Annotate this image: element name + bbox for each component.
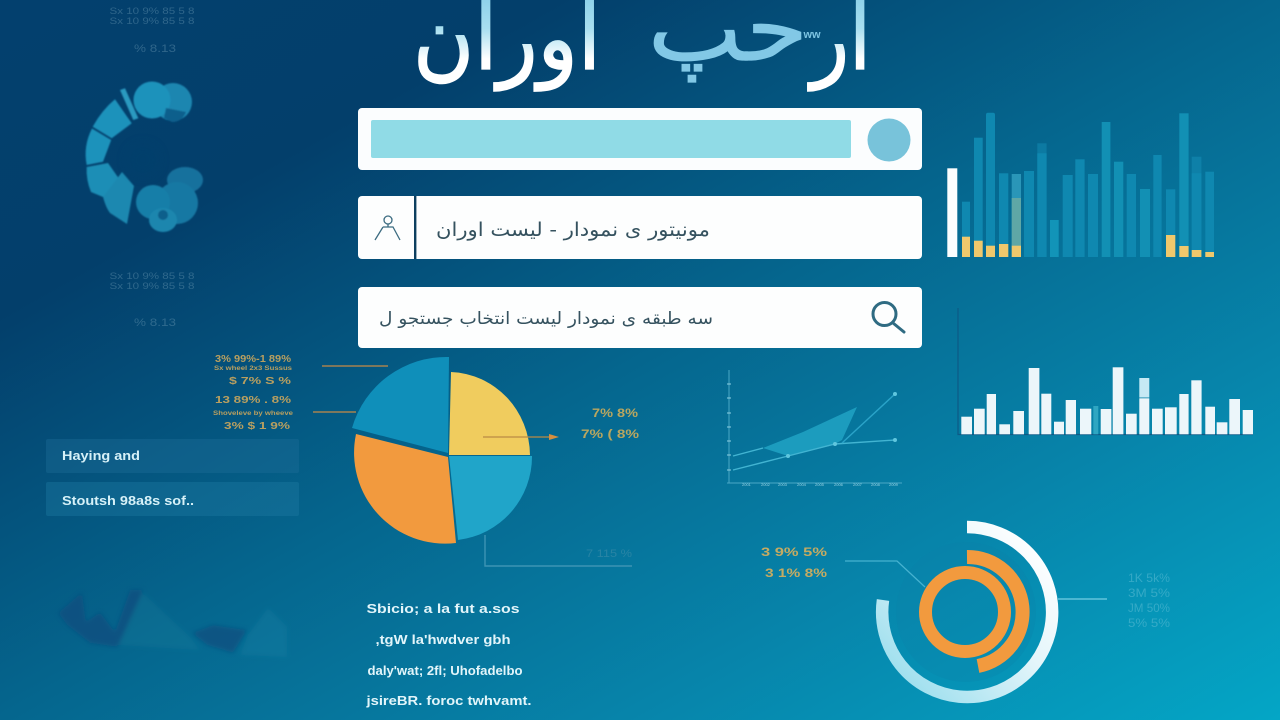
- slice: blue: [352, 357, 449, 453]
- slice: orange: [354, 434, 456, 544]
- pie labels: left: $ 7% S %: [229, 376, 291, 387]
- row 1: [46, 439, 299, 473]
- leader lines: left of pie: [313, 366, 388, 412]
- faded labels: upper left: [110, 6, 194, 329]
- middle orange arc: [967, 557, 1023, 666]
- faded labels: upper left: Sx 10 9% 85 5 8: [110, 6, 194, 16]
- search bar: query field: [358, 287, 922, 348]
- x labels: 2001: [742, 482, 752, 487]
- ring label: left: 3 9% 5%: [761, 545, 827, 559]
- title: [413, 0, 871, 92]
- markers: [786, 392, 897, 458]
- paragraph text: daly'wat; 2fl; Uhofadelbo: [368, 663, 523, 678]
- x labels: 2003: [778, 482, 788, 487]
- donut center shade: [127, 144, 159, 176]
- pie labels: left: [213, 354, 294, 432]
- yellow bars: [962, 235, 1214, 257]
- ring label: left: [761, 545, 827, 580]
- faded labels: upper left: Sx 10 9% 85 5 8: [110, 271, 194, 281]
- search bar: progress: [358, 108, 922, 170]
- white bars: [961, 367, 1253, 434]
- ring label: right faded: 1K 5k%: [1128, 571, 1170, 585]
- bar chart: white: [958, 308, 1253, 434]
- pie arrow: [483, 434, 559, 440]
- x labels: 2009: [889, 482, 899, 487]
- x labels: 2002: [761, 482, 771, 487]
- inner orange ring: [926, 572, 1004, 652]
- axes: [727, 370, 902, 483]
- x labels: 2006: [834, 482, 844, 487]
- ring leader: right: [1058, 598, 1107, 600]
- pie label: right: 7% 8%: [592, 406, 638, 420]
- pie labels: left: Sx wheel 2x3 Sussus: [214, 366, 293, 372]
- ring track: [896, 542, 1036, 682]
- faded labels: upper left: % 8.13: [134, 43, 176, 55]
- slice: yellow: [449, 372, 530, 455]
- faded labels: upper left: Sx 10 9% 85 5 8: [110, 281, 194, 291]
- icon: person: [375, 216, 400, 240]
- x labels: 2004: [797, 482, 807, 487]
- ring label: right faded: 3M 5%: [1128, 586, 1170, 600]
- ring label: left: 3 1% 8%: [765, 566, 827, 580]
- ring chart: [882, 527, 1052, 697]
- pie chart: [352, 357, 532, 544]
- pie labels: left: 3% 99%-1 89%: [215, 354, 291, 365]
- white bar: [947, 168, 957, 257]
- x labels: 2005: [815, 482, 825, 487]
- accent bars: [1139, 378, 1149, 398]
- pie labels: left: 13 89% . 8%: [215, 395, 291, 406]
- search bar: user field: [358, 196, 922, 259]
- faded labels: upper left: % 8.13: [134, 317, 176, 329]
- pie labels: left: Shoveleve by wheeve: [213, 411, 294, 417]
- ring segments: [86, 88, 138, 224]
- icon: magnifier: [873, 302, 904, 332]
- pie callout: lower: 7 115 %: [586, 548, 632, 560]
- paragraph text: jsireBR. foroc twhvamt.: [365, 693, 532, 708]
- outer arc: [882, 527, 1052, 697]
- paragraph text: Sbicio; a la fut a.sos: [366, 601, 520, 616]
- area: [763, 407, 857, 456]
- y ticks: [727, 384, 731, 470]
- title small mark: ww: [802, 29, 821, 41]
- x labels: [742, 482, 899, 487]
- row 1: Haying and: [62, 448, 140, 463]
- row 2: Stoutsh 98a8s sof..: [62, 493, 194, 508]
- pie callout: lower: [485, 535, 632, 566]
- light peaks: [120, 593, 200, 650]
- blue bars: [962, 113, 1214, 257]
- dark peaks: [58, 590, 143, 647]
- ring leader: left: [845, 561, 925, 587]
- ring label: right faded: JM 50%: [1128, 601, 1170, 615]
- line chart: [727, 370, 902, 487]
- ring label: right faded: [1128, 571, 1170, 630]
- paragraph text: ,tgW la'hwdver gbh: [376, 632, 511, 647]
- faded labels: upper left: Sx 10 9% 85 5 8: [110, 16, 194, 26]
- pie label: right: 7% ( 8%: [581, 427, 639, 441]
- axis: [958, 308, 1253, 434]
- pie labels: left: 3% $ 1 9%: [224, 421, 290, 432]
- field text: سه طبقه ی نمودار لیست انتخاب جستجو ل: [379, 309, 713, 329]
- x labels: 2007: [853, 482, 863, 487]
- left info rows: [46, 439, 299, 516]
- x labels: 2008: [871, 482, 881, 487]
- field text: مونیتور ی نمودار - لیست اوران: [436, 219, 710, 241]
- donut: faded segmented ring: [86, 82, 203, 232]
- pie label: right: [581, 406, 639, 441]
- highlight bar: [1012, 198, 1021, 246]
- series lines: [733, 440, 895, 470]
- blobs: [154, 83, 192, 121]
- slice: light blue: [449, 456, 532, 540]
- bar chart: top right: [947, 113, 1214, 257]
- row 2: [46, 482, 299, 516]
- paragraph text: [365, 601, 532, 708]
- ring label: right faded: 5% 5%: [1128, 616, 1170, 630]
- faded mountains: [58, 590, 287, 657]
